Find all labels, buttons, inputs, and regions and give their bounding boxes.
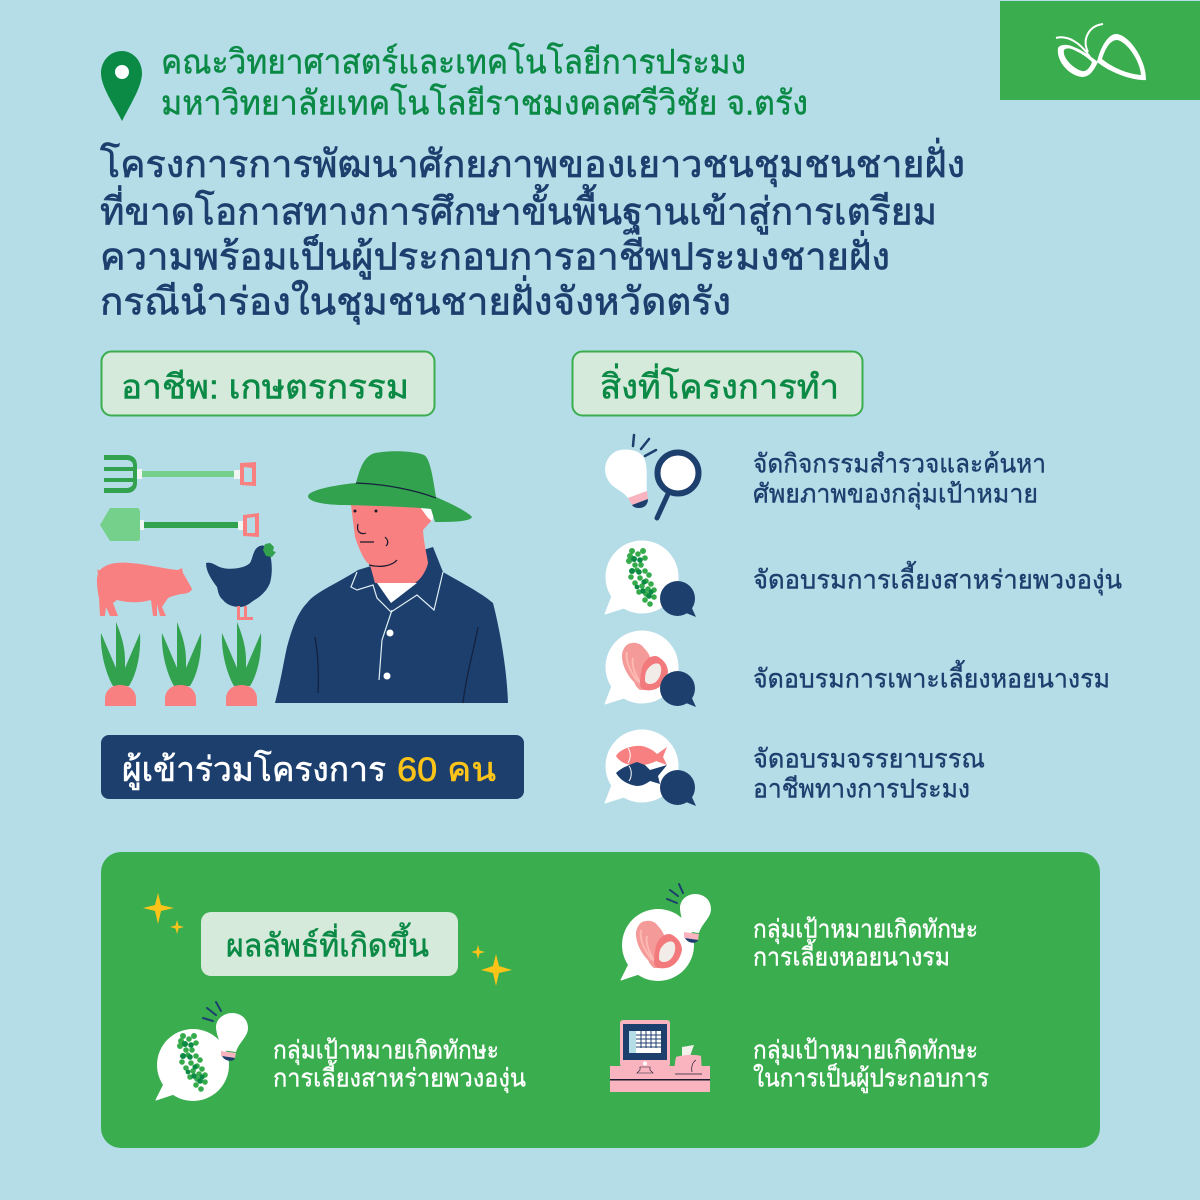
results text: oyster: กลุ่มเป้าหมายเกิดทักษะ	[753, 916, 978, 944]
title: ความพร้อมเป็นผู้ประกอบการอาชีพประมงชายฝั่ง	[100, 230, 890, 280]
icon: bubbles with oyster	[605, 630, 696, 707]
badge: occupation: อาชีพ: เกษตรกรรม	[121, 368, 409, 406]
title: กรณีนำร่องในชุมชนชายฝั่งจังหวัดตรัง	[100, 276, 731, 324]
faculty heading: มหาวิทยาลัยเทคโนโลยีราชมงคลศรีวิชัย จ.ตรัง	[161, 84, 808, 122]
results text: sea grapes	[273, 1036, 526, 1094]
panel: results	[101, 852, 1100, 1148]
title: โครงการการพัฒนาศักยภาพของเยาวชนชุมชนชายฝั่ง	[100, 138, 965, 187]
icon: vegetables	[101, 622, 261, 706]
results text: entrepreneur	[753, 1036, 989, 1094]
icon: location pin	[101, 51, 142, 121]
results text: entrepreneur: กลุ่มเป้าหมายเกิดทักษะ	[753, 1036, 978, 1066]
participants banner: 60 คน	[397, 751, 496, 789]
icon: cashier terminal	[610, 1020, 710, 1092]
icon: bubbles with fish	[605, 730, 696, 806]
results text: entrepreneur: ในการเป็นผู้ประกอบการ	[753, 1062, 989, 1094]
icon: bubbles with sea grapes	[605, 540, 696, 617]
results text: sea grapes: การเลี้ยงสาหร่ายพวงองุ่น	[273, 1060, 526, 1094]
badge: results heading: ผลลัพธ์ที่เกิดขึ้น	[226, 922, 429, 964]
badge: results heading	[201, 912, 458, 976]
activities text: จัดอบรมจรรยาบรรณ	[753, 744, 985, 774]
icon: bulb and magnifier	[605, 435, 698, 518]
illustration: farmer	[275, 451, 508, 703]
icon: pig	[97, 563, 192, 616]
badge: occupation	[102, 352, 434, 416]
icon: chicken	[206, 543, 276, 620]
results text: sea grapes: กลุ่มเป้าหมายเกิดทักษะ	[273, 1036, 499, 1066]
faculty heading	[161, 42, 808, 122]
badge: project activities: สิ่งที่โครงการทำ	[600, 364, 839, 406]
participants banner: ผู้เข้าร่วมโครงการ	[122, 750, 386, 790]
badge: project activities	[572, 352, 862, 416]
results text: oyster	[753, 916, 978, 972]
icon: shovel	[100, 508, 259, 541]
title	[100, 138, 965, 324]
activities text: อาชีพทางการประมง	[753, 774, 970, 804]
icon: bulb with sea grape bubble	[156, 1002, 248, 1101]
icon: bulb with oyster bubble	[621, 884, 711, 981]
results text: oyster: การเลี้ยงหอยนางรม	[753, 938, 950, 972]
logo badge	[1000, 1, 1200, 100]
activities text: จัดอบรมการเลี้ยงสาหร่ายพวงองุ่น	[753, 560, 1122, 596]
faculty heading: คณะวิทยาศาสตร์และเทคโนโลยีการประมง	[161, 42, 746, 82]
icon: sparkles right	[471, 945, 512, 986]
activities text: ศัพยภาพของกลุ่มเป้าหมาย	[753, 478, 1038, 510]
participants banner	[101, 735, 524, 799]
title: ที่ขาดโอกาสทางการศึกษาขั้นพื้นฐานเข้าสู่การเตรียม	[100, 184, 937, 234]
activities text: จัดกิจกรรมสำรวจและค้นหา	[753, 448, 1046, 478]
icon: sparkles left	[143, 893, 184, 934]
icon: pitchfork	[104, 455, 256, 493]
activities text	[753, 448, 1122, 804]
activities text: จัดอบรมการเพาะเลี้ยงหอยนางรม	[753, 660, 1110, 694]
